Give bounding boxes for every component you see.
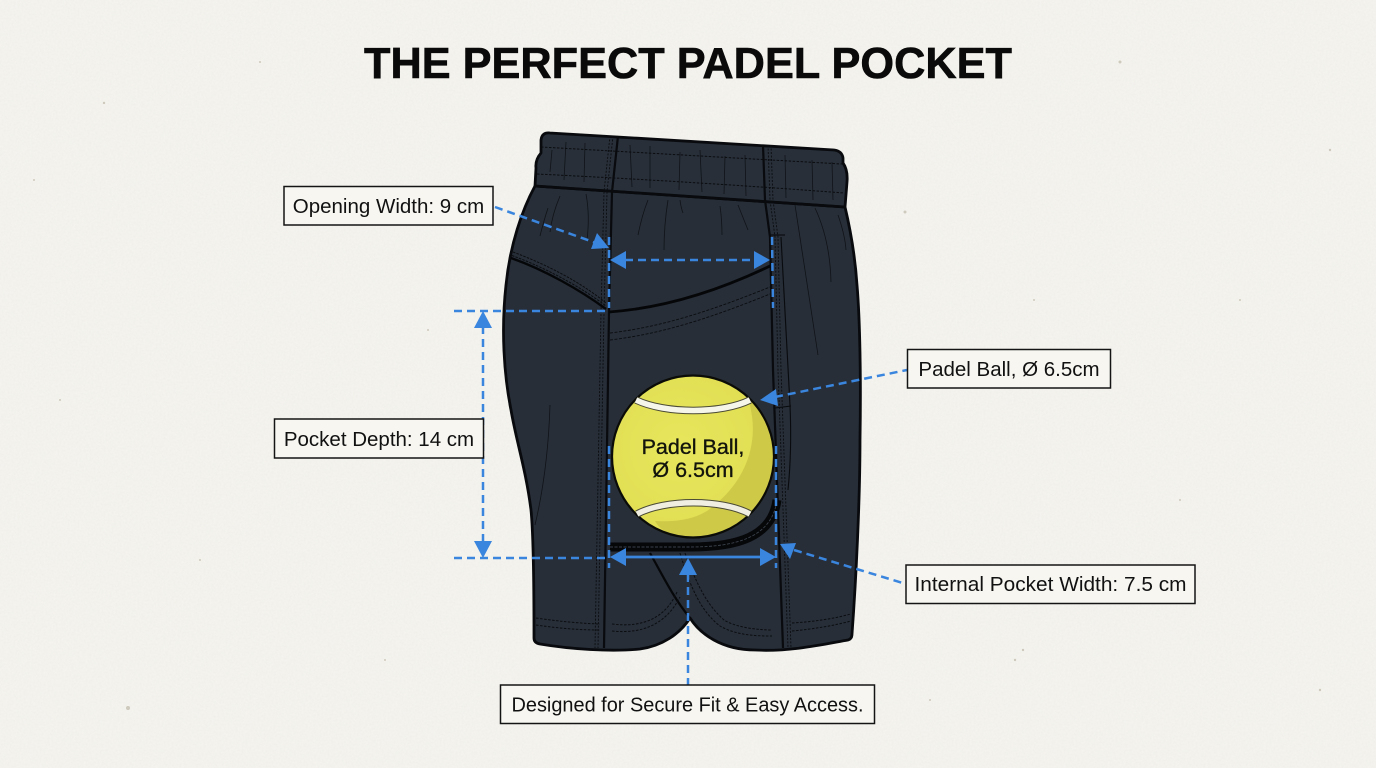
ball shading (655, 402, 773, 536)
label: pocket depth: Pocket Depth: 14 cm (284, 428, 474, 451)
label: padel ball (908, 350, 1110, 388)
label: opening width (284, 186, 493, 225)
label: padel ball: Padel Ball, Ø 6.5cm (918, 358, 1100, 381)
label: secure fit: Designed for Secure Fit & Easy Access. (512, 694, 864, 716)
side seams (604, 136, 783, 648)
shorts illustration (504, 133, 860, 650)
arrowheads: pocket depth (474, 311, 492, 558)
dimension: internal pocket width (609, 446, 906, 584)
arrowheads: opening width (591, 233, 770, 269)
label: pocket depth (274, 419, 484, 458)
title: THE PERFECT PADEL POCKET (364, 40, 1012, 88)
label: internal pocket width: Internal Pocket Width: 7.5 cm (914, 573, 1186, 596)
pocket opening curve (609, 266, 770, 312)
shorts body (504, 186, 860, 650)
back yoke seam (511, 252, 606, 309)
ball label: Ø 6.5cm (652, 458, 734, 482)
label: opening width: Opening Width: 9 cm (293, 195, 484, 218)
dimension: pocket depth (454, 311, 606, 558)
ball seams (636, 400, 750, 410)
waistband (535, 133, 847, 207)
label: internal pocket width (906, 565, 1195, 604)
dimension: ball pointer (760, 370, 907, 406)
waistband stitching (537, 147, 844, 193)
dimension: secure fit pointer (679, 558, 697, 685)
dimension: opening width (495, 207, 773, 308)
leg slit seams (536, 553, 851, 636)
padel ball (612, 376, 786, 541)
waist seam (535, 186, 845, 207)
ball label: Padel Ball, (642, 435, 744, 459)
waistband gathers (535, 142, 846, 525)
zip slit (769, 235, 791, 490)
pocket bag bottom (610, 500, 777, 547)
label: secure fit (500, 685, 874, 724)
